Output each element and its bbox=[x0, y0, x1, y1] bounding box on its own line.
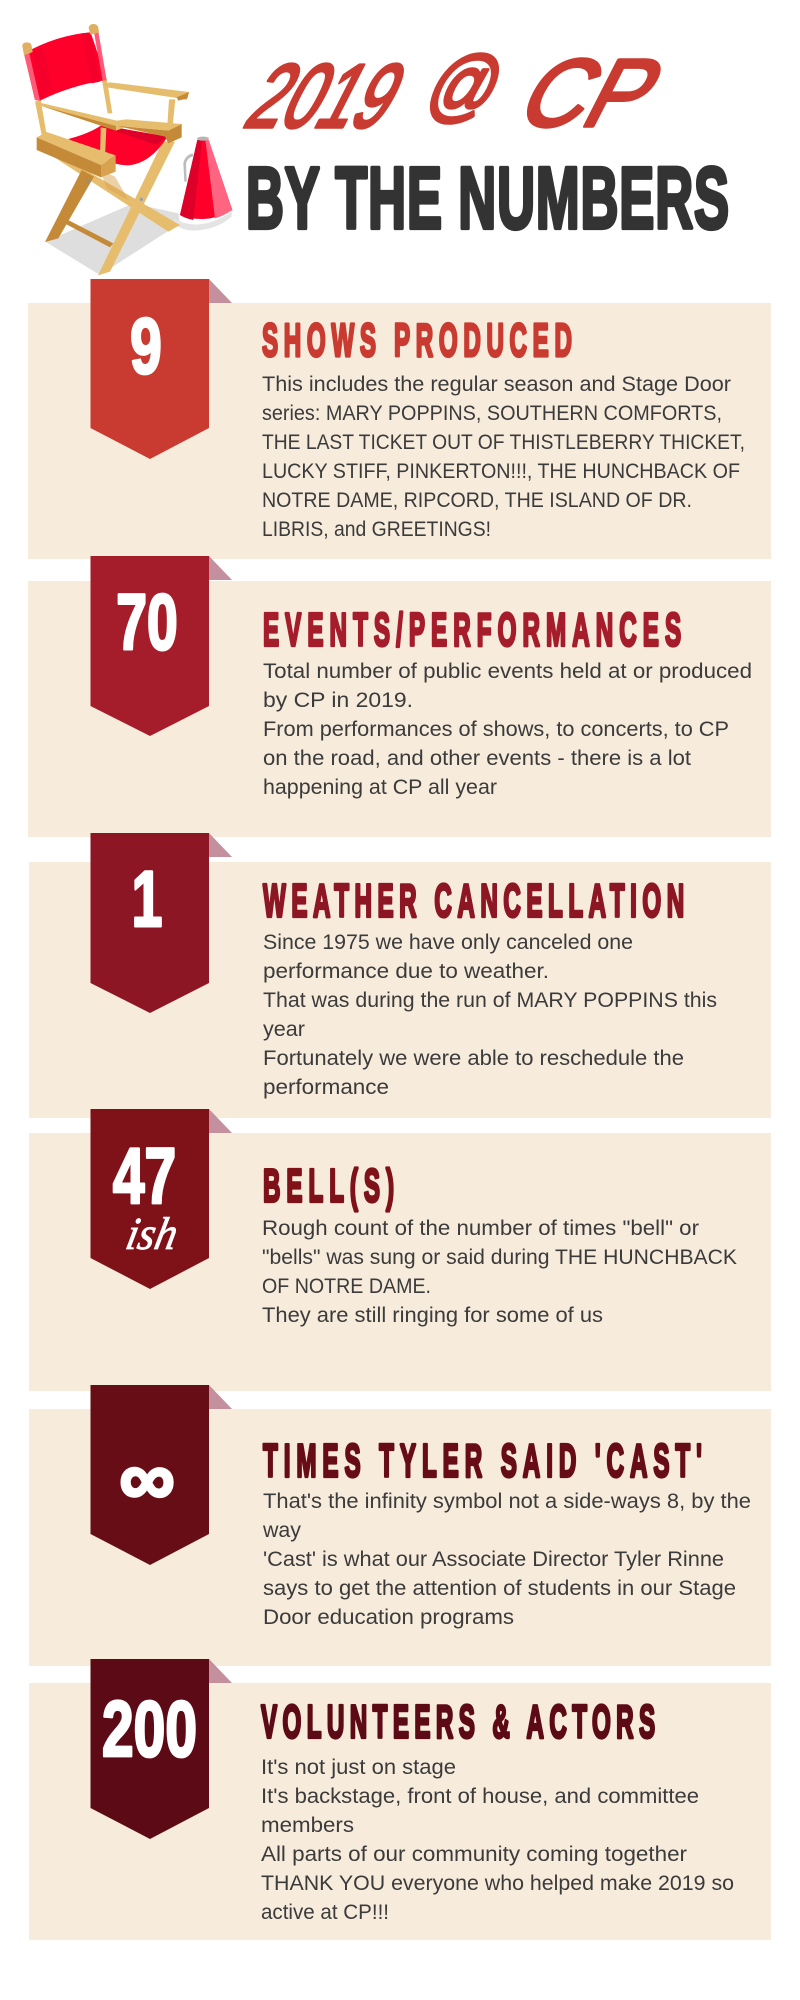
icon: director's chair and megaphone bbox=[22, 24, 232, 275]
ribbon fold bbox=[209, 556, 232, 580]
body text: LUCKY STIFF, PINKERTON!!!, THE HUNCHBACK OF bbox=[262, 459, 740, 483]
number: 1: 1 bbox=[132, 855, 162, 943]
title: 2019 @ CP bbox=[231, 39, 681, 147]
body text bbox=[263, 659, 752, 799]
number: 47 ish: 47 bbox=[113, 1132, 176, 1220]
body text: by CP in 2019. bbox=[263, 688, 413, 712]
panel background bbox=[28, 581, 771, 837]
heading: BELL(S) bbox=[263, 1159, 394, 1212]
panel background bbox=[28, 303, 771, 559]
ribbon fold bbox=[209, 833, 232, 857]
panel background bbox=[29, 1409, 771, 1666]
heading: EVENTS/PERFORMANCES bbox=[263, 603, 681, 656]
heading: WEATHER CANCELLATION bbox=[263, 874, 684, 927]
panel: times tyler said cast bbox=[29, 1385, 771, 1666]
title: 2019 @ CP: CP bbox=[502, 39, 681, 147]
body text bbox=[262, 372, 745, 541]
body text: LIBRIS, and GREETINGS! bbox=[262, 517, 491, 541]
body text: NOTRE DAME, RIPCORD, THE ISLAND OF DR. bbox=[262, 488, 692, 512]
title: 2019 @ CP: @ bbox=[416, 39, 516, 129]
body text: series: MARY POPPINS, SOUTHERN COMFORTS, bbox=[262, 401, 722, 425]
body text bbox=[261, 1755, 734, 1924]
number: 47 ish: ish bbox=[122, 1209, 182, 1260]
panel: bell(s) bbox=[29, 1109, 771, 1391]
ribbon bbox=[90, 279, 209, 459]
heading: TIMES TYLER SAID 'CAST' bbox=[263, 1434, 702, 1487]
body text: Door education programs bbox=[263, 1605, 514, 1629]
body text: They are still ringing for some of us bbox=[262, 1303, 603, 1327]
body text: From performances of shows, to concerts, to CP bbox=[263, 717, 729, 741]
body text: OF NOTRE DAME. bbox=[262, 1274, 431, 1298]
body text: Since 1975 we have only canceled one bbox=[263, 930, 633, 954]
ribbon fold bbox=[209, 1659, 232, 1683]
ribbon bbox=[90, 833, 209, 1013]
panel background bbox=[29, 1133, 771, 1391]
body text: 'Cast' is what our Associate Director Tyler Rinne bbox=[263, 1547, 724, 1571]
number: 200: 200 bbox=[102, 1685, 197, 1773]
ribbon bbox=[90, 1659, 209, 1839]
body text: It's not just on stage bbox=[261, 1755, 456, 1779]
number: 47 ish bbox=[113, 1132, 182, 1260]
panel: volunteers and actors bbox=[29, 1659, 771, 1940]
body text: way bbox=[262, 1518, 301, 1542]
title: BY THE NUMBERS: BY THE NUMBERS bbox=[246, 150, 729, 247]
body text bbox=[262, 1216, 738, 1327]
number: 9: 9 bbox=[130, 302, 162, 390]
panel: events/performances bbox=[28, 556, 771, 837]
body text: "bells" was sung or said during THE HUNCHBACK bbox=[262, 1245, 738, 1269]
body text: Fortunately we were able to reschedule the bbox=[263, 1046, 684, 1070]
body text: THANK YOU everyone who helped make 2019 so bbox=[261, 1871, 734, 1895]
title: 2019 @ CP: 2019 bbox=[231, 46, 422, 147]
body text: active at CP!!! bbox=[261, 1900, 389, 1924]
body text: It's backstage, front of house, and committee bbox=[261, 1784, 699, 1808]
panel: shows produced bbox=[28, 279, 771, 559]
body text bbox=[263, 930, 717, 1099]
body text: All parts of our community coming together bbox=[261, 1842, 687, 1866]
body text: Total number of public events held at or produced bbox=[263, 659, 752, 683]
ribbon bbox=[90, 556, 209, 736]
body text bbox=[262, 1489, 751, 1629]
body text: year bbox=[263, 1017, 305, 1041]
body text: happening at CP all year bbox=[263, 775, 497, 799]
ribbon fold bbox=[209, 1109, 232, 1133]
body text: on the road, and other events - there is a lot bbox=[263, 746, 691, 770]
ribbon fold bbox=[209, 279, 232, 303]
panel background bbox=[29, 862, 771, 1118]
ribbon bbox=[90, 1109, 209, 1289]
body text: That was during the run of MARY POPPINS this bbox=[263, 988, 717, 1012]
panel background bbox=[29, 1683, 771, 1940]
number: 70: 70 bbox=[116, 578, 178, 666]
body text: members bbox=[261, 1813, 354, 1837]
heading: VOLUNTEERS & ACTORS bbox=[261, 1695, 655, 1748]
ribbon bbox=[90, 1385, 209, 1565]
body text: Rough count of the number of times "bell" or bbox=[262, 1216, 699, 1240]
ribbon fold bbox=[209, 1385, 232, 1409]
number: infinity: ∞ bbox=[119, 1434, 175, 1522]
body text: This includes the regular season and Stage Door bbox=[262, 372, 731, 396]
body text: performance due to weather. bbox=[263, 959, 549, 983]
body text: That's the infinity symbol not a side-ways 8, by the bbox=[263, 1489, 751, 1513]
heading: SHOWS PRODUCED bbox=[262, 313, 572, 366]
body text: performance bbox=[263, 1075, 389, 1099]
body text: says to get the attention of students in our Stage bbox=[263, 1576, 736, 1600]
panel: weather cancellation bbox=[29, 833, 771, 1118]
body text: THE LAST TICKET OUT OF THISTLEBERRY THICKET, bbox=[262, 430, 745, 454]
